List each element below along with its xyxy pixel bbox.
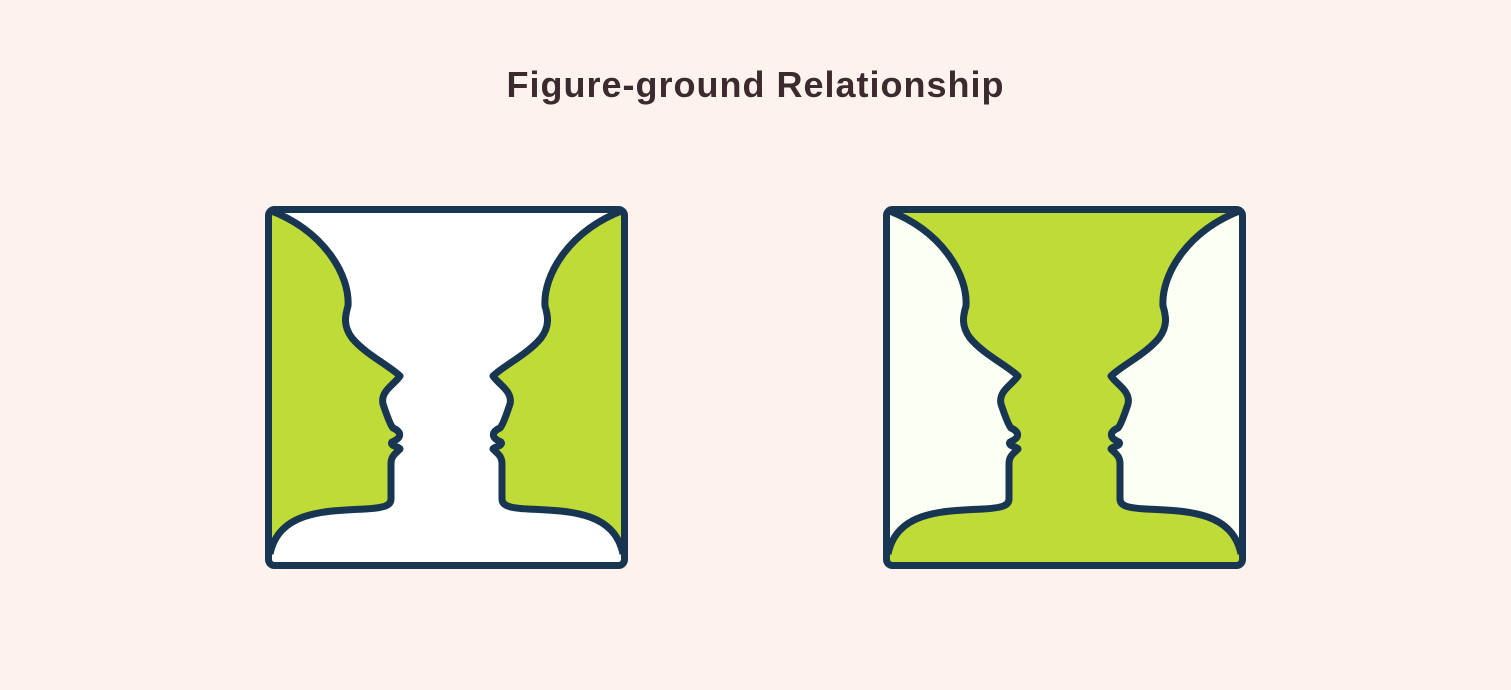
panel: vase figure bbox=[886, 209, 1243, 566]
panel: faces figure bbox=[268, 209, 625, 566]
title: Figure-ground Relationship bbox=[506, 64, 1004, 105]
